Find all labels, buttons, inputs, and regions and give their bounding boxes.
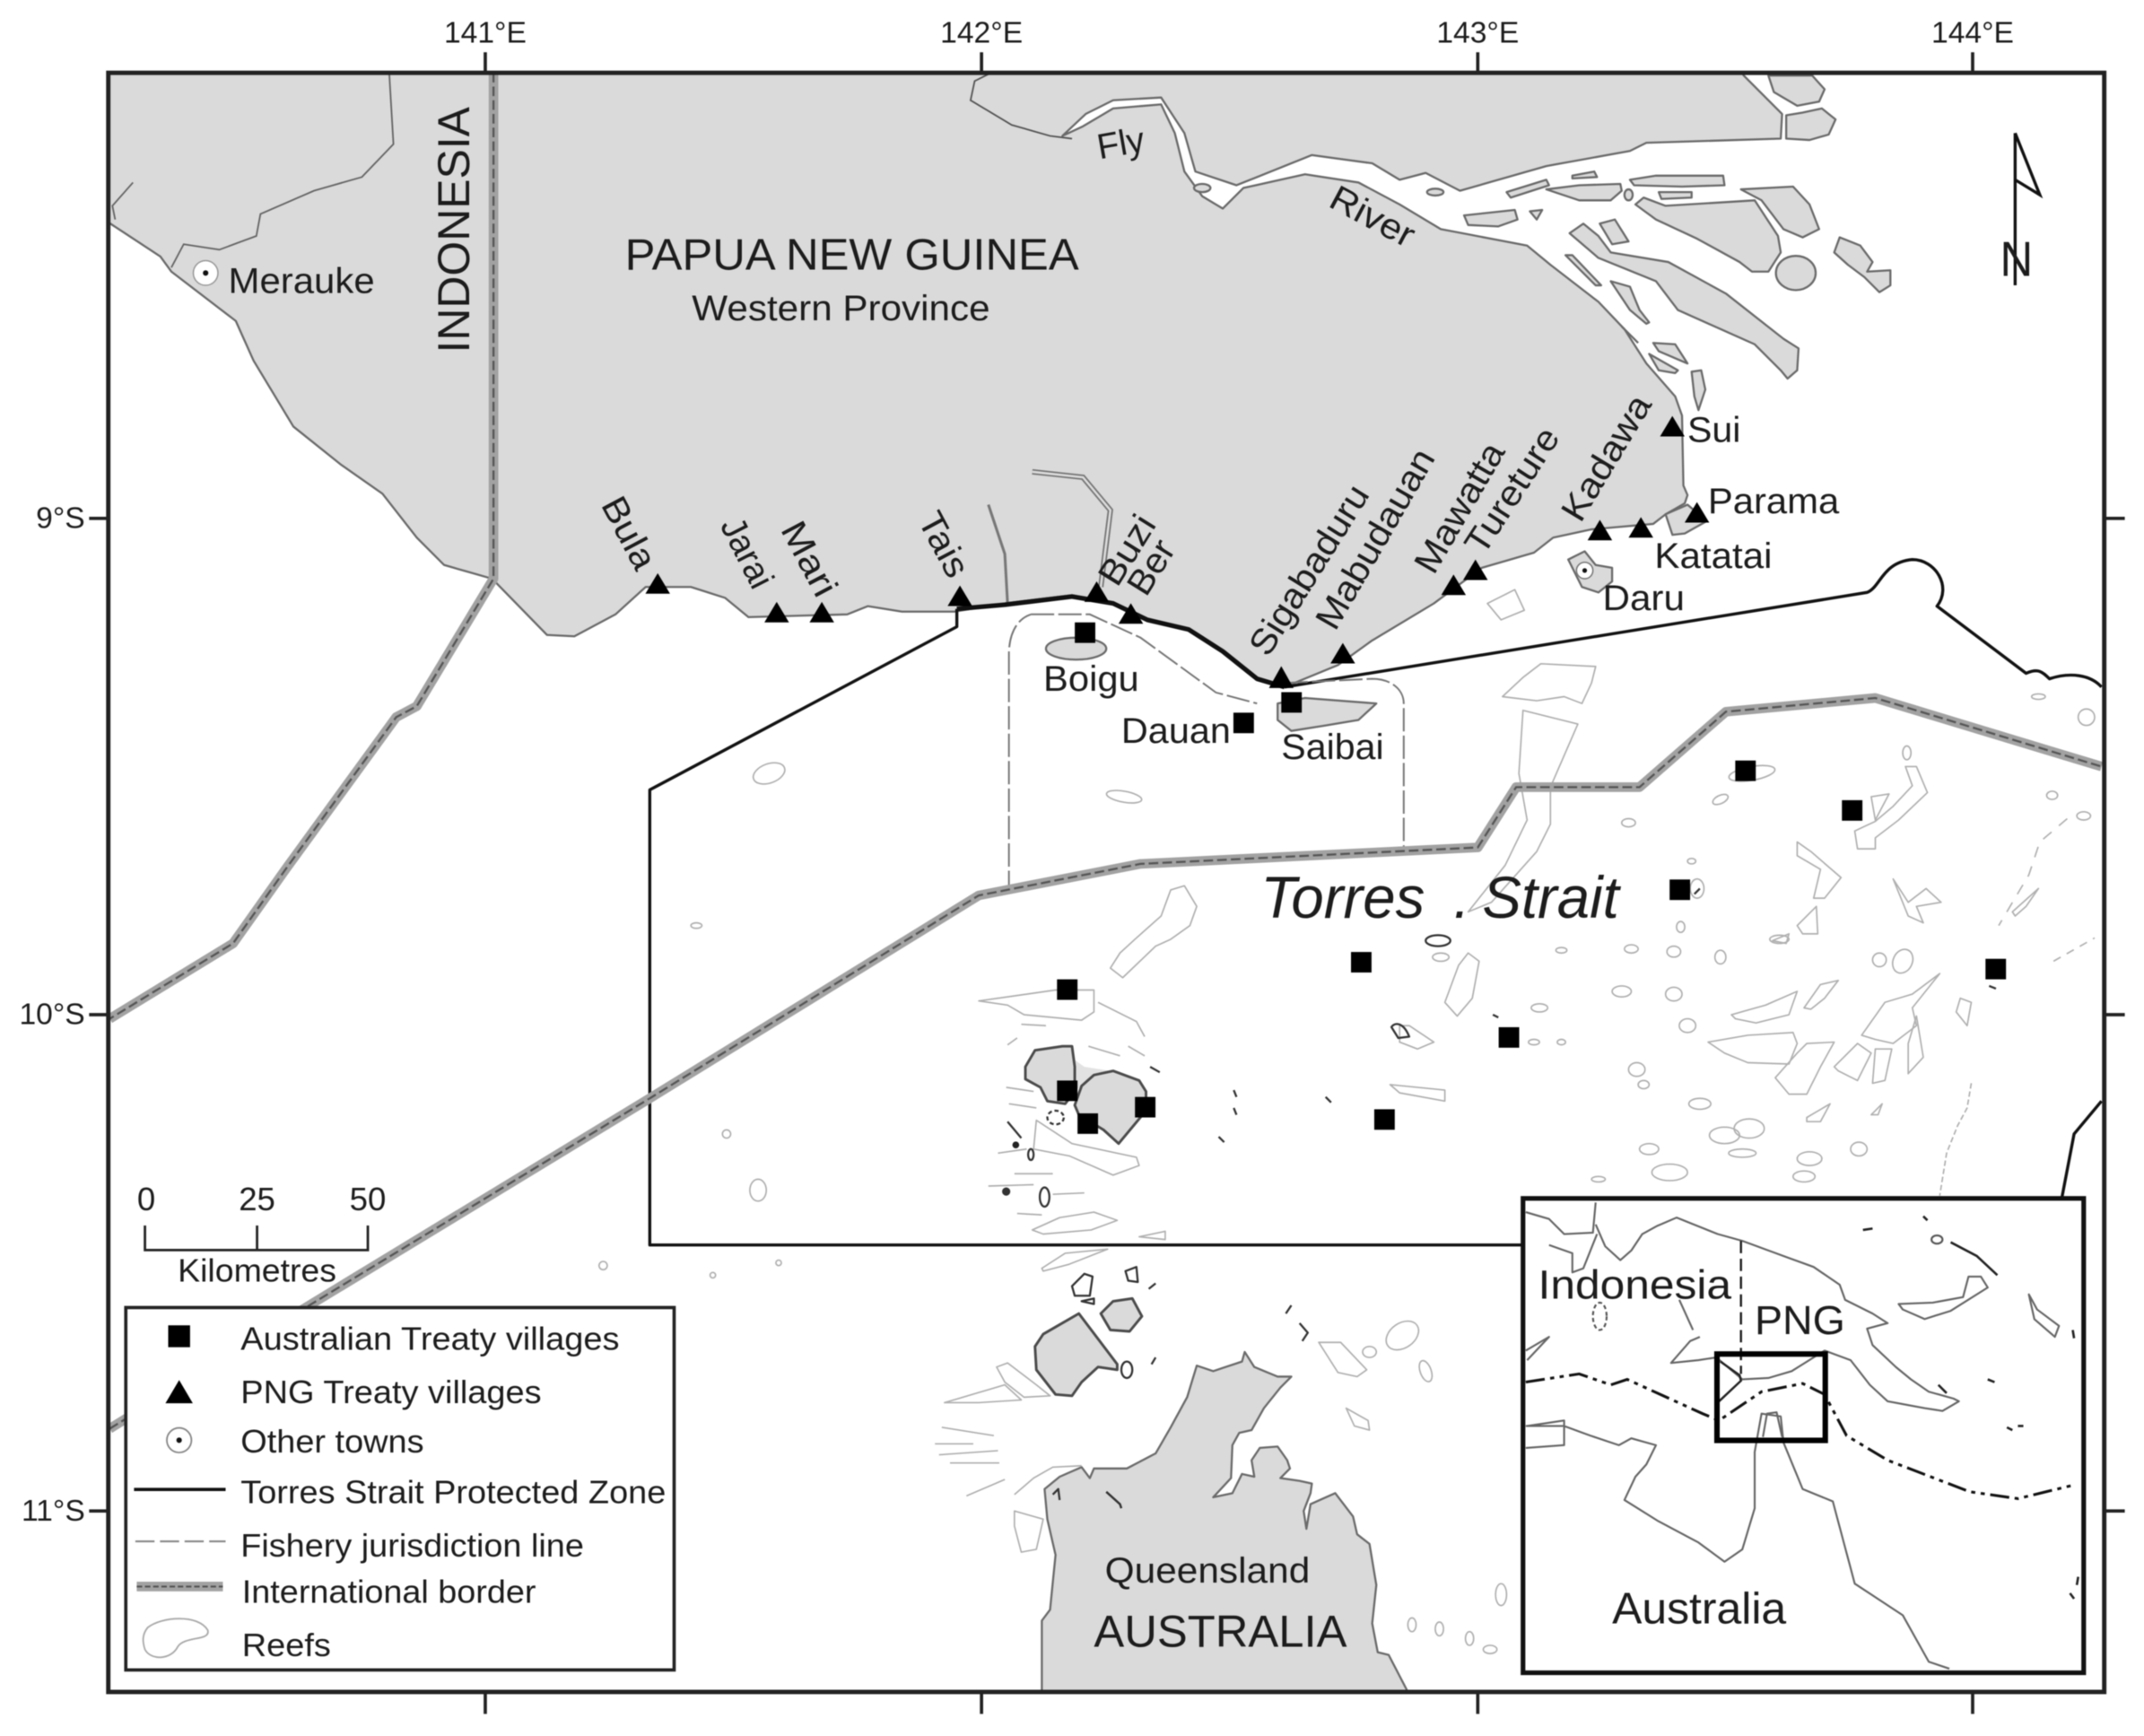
axis labels: 11°S [22, 1495, 85, 1528]
scale bar [137, 1181, 386, 1288]
village labels: angled: Sigabaduru [1242, 477, 1377, 662]
inset: islands [1898, 1277, 2059, 1337]
island: Moa [1075, 1071, 1146, 1144]
village labels: angled: Ber [1120, 532, 1183, 602]
island: Horn [1101, 1298, 1142, 1331]
legend labels: Australian Treaty villages [240, 1321, 620, 1357]
Torres Strait label: Torres [1260, 865, 1425, 930]
place labels: countries [428, 107, 1347, 1656]
inset: maritime boundary [1526, 1374, 2074, 1498]
village labels: angled: Tureture [1457, 420, 1568, 562]
island: Parama [1666, 505, 1707, 535]
island: Boigu [1046, 638, 1106, 659]
river: coastal creek [989, 505, 1007, 604]
river labels [1094, 120, 1422, 256]
inset: border dashed [1740, 1241, 1742, 1374]
line: Fishery jurisdiction [1009, 615, 1404, 894]
axis labels: 144°E [1931, 17, 2014, 50]
village labels: angled: Tais [910, 505, 977, 584]
place labels: countries: PAPUA NEW GUINEA [625, 231, 1079, 279]
inset labels: Australia [1612, 1585, 1787, 1634]
village labels: horizontal: Boigu [1043, 659, 1139, 699]
place labels: countries: Western Province [692, 289, 990, 328]
legend symbol: square [168, 1325, 190, 1348]
line: Torres Strait Protected Zone [649, 560, 2102, 1245]
island: Daru [1568, 552, 1612, 592]
axis labels: 9°S [36, 502, 85, 536]
town symbol: Daru [1576, 563, 1593, 579]
reefs: dark islets [1002, 888, 1996, 1500]
Australian Treaty village markers [1057, 623, 2006, 1134]
inset: cape in box [1763, 1412, 1782, 1437]
legend labels: International border [242, 1574, 536, 1610]
legend symbol: triangle [165, 1380, 193, 1403]
land: inland creek on Cape York [1106, 1492, 1121, 1508]
north arrow: N [2000, 231, 2033, 286]
Torres Strait label [1260, 865, 1622, 930]
village labels: horizontal: Daru [1602, 579, 1685, 618]
reefs [599, 589, 2095, 1653]
river: Pahoturi outer [1033, 472, 1111, 587]
inset: dark island fragments [1863, 1217, 2079, 1599]
legend [126, 1307, 674, 1670]
legend labels: Torres Strait Protected Zone [240, 1473, 666, 1510]
village labels: horizontal: Sui [1687, 411, 1740, 450]
place labels: countries: INDONESIA [428, 107, 479, 353]
inset labels: PNG [1755, 1297, 1845, 1343]
axis labels: 143°E [1436, 17, 1519, 50]
legend labels: Fishery jurisdiction line [240, 1527, 584, 1564]
inset: New Guinea coast [1526, 1202, 1959, 1411]
inset: protected zone [1719, 1362, 1741, 1401]
village labels: horizontal: Katatai [1654, 537, 1773, 576]
scale bar: 25 [239, 1181, 275, 1217]
land: Cape York, Queensland [1041, 1352, 1408, 1692]
village labels: horizontal [229, 261, 1840, 767]
village labels: angled: Jarai [712, 511, 781, 595]
Torres Strait label: . [1453, 865, 1470, 930]
river labels: Fly [1094, 120, 1147, 167]
legend labels: Reefs [242, 1627, 331, 1663]
village labels: angled: Bula [593, 490, 665, 577]
legend labels: PNG Treaty villages [240, 1374, 542, 1410]
axis labels: 142°E [940, 17, 1023, 50]
village labels: angled [593, 387, 1660, 662]
village labels: angled: Buzi [1091, 508, 1164, 593]
village labels: horizontal: Merauke [229, 261, 375, 301]
inset labels [1538, 1261, 1845, 1634]
place labels: countries: AUSTRALIA [1094, 1605, 1347, 1656]
island: Prince of Wales [1035, 1313, 1117, 1396]
map: land masses [109, 73, 1890, 1692]
legend labels [240, 1321, 666, 1663]
river: upper Fly line [971, 73, 1072, 139]
village labels: horizontal: Dauan [1121, 711, 1231, 751]
river: Pahoturi inner [1033, 472, 1111, 587]
Torres Strait label: Strait [1482, 865, 1622, 930]
legend symbol: protected zone [134, 1488, 226, 1490]
inset map [1523, 1199, 2084, 1673]
legend symbol: fishery line [135, 1540, 226, 1542]
inset: small reef ellipses [1593, 1235, 1942, 1330]
inset labels: Indonesia [1538, 1261, 1732, 1307]
town symbol: Merauke [193, 261, 218, 285]
legend labels: Other towns [240, 1423, 424, 1460]
village labels: angled: Mawatta [1407, 435, 1513, 580]
inset: Papua west [1526, 1234, 1597, 1360]
scale bar: 50 [350, 1181, 386, 1217]
place labels: countries: Queensland [1105, 1551, 1310, 1591]
village labels: horizontal: Saibai [1281, 728, 1384, 767]
islands: Fly delta [1194, 75, 1890, 410]
village labels: angled: Mabudauan [1308, 442, 1443, 636]
scale bar: Kilometres [178, 1252, 336, 1288]
axis labels: 10°S [19, 999, 85, 1032]
legend symbol: reef [144, 1618, 208, 1657]
river labels: River [1323, 179, 1422, 256]
village labels: angled: Mari [773, 515, 845, 604]
international border [109, 73, 2102, 1429]
village labels: angled: Kadawa [1554, 387, 1660, 528]
legend symbol: town [167, 1428, 191, 1452]
land: Papua New Guinea and Indonesia [109, 73, 1782, 687]
north arrow [2000, 133, 2040, 286]
scale bar: 0 [137, 1181, 155, 1217]
axis labels: 141°E [444, 17, 527, 50]
legend symbol: international border [136, 1583, 222, 1590]
island: Saibai [1277, 698, 1376, 731]
PNG Treaty village markers [645, 416, 1709, 688]
village labels: horizontal: Parama [1708, 482, 1840, 521]
river: Indonesian rivers [112, 74, 394, 267]
inset: Australia coast [1526, 1414, 1949, 1669]
island: strait between Badu and Moa [1075, 1060, 1111, 1092]
island: Badu [1025, 1046, 1075, 1104]
inset: focus box [1717, 1354, 1826, 1440]
